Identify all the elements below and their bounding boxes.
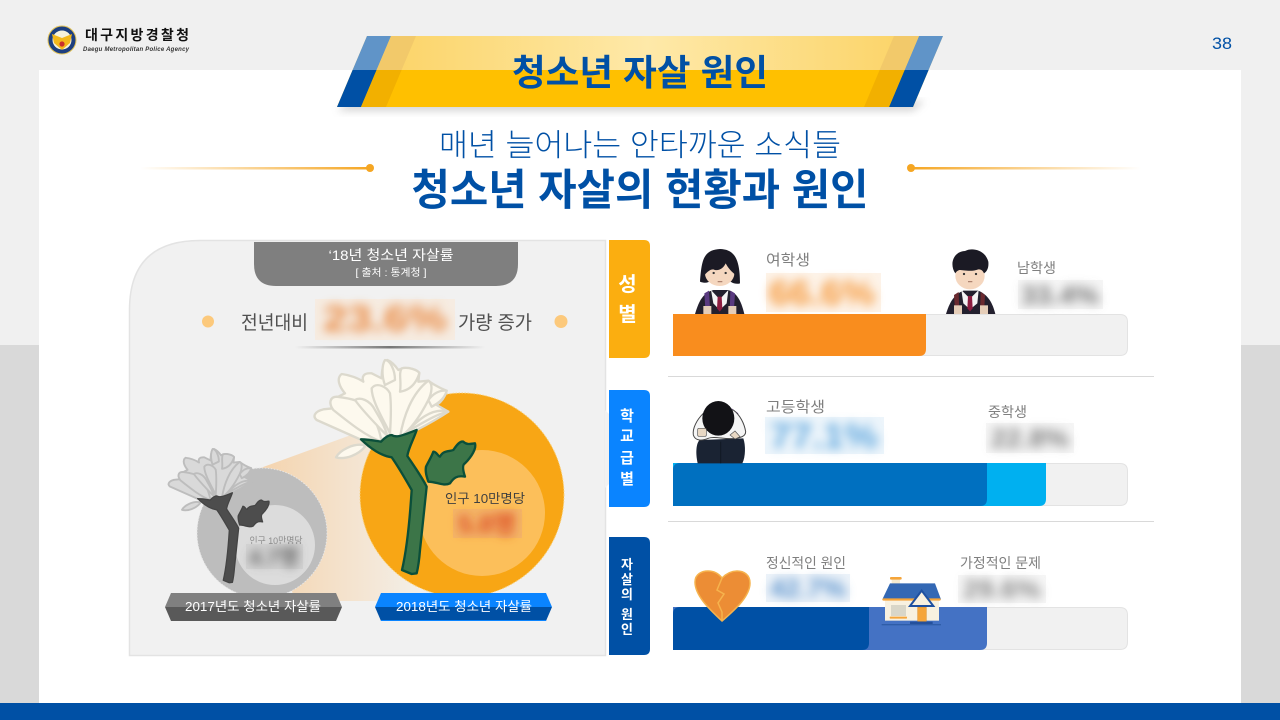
tab: causes: 인 [621, 622, 633, 637]
value: family causes: 29.6% [963, 574, 1041, 604]
circle: 2018 rate [360, 393, 564, 597]
label: mental causes: 정신적인 원인 [766, 555, 846, 571]
icon: boy student [946, 249, 995, 314]
value: male students: 33.4% [1021, 280, 1099, 310]
icon: broken heart [695, 571, 750, 621]
tab: causes: 자 [621, 557, 633, 572]
tab title: ‘18년 청소년 자살률 [328, 247, 454, 263]
ribbon: 2017 [165, 593, 342, 621]
value: mental causes: 42.7% [770, 573, 846, 603]
tab: gender [609, 240, 650, 358]
value: high school students: 77.1% [770, 417, 878, 456]
2017 caption: 인구 10만명당 [250, 536, 303, 547]
right decorative line [907, 164, 1141, 172]
ribbon: 2017: 2017년도 청소년 자살률 [185, 599, 321, 614]
value: female students: 66.6% [769, 274, 875, 313]
year-on-year increase statement: 가량 증가 [458, 312, 532, 334]
title banner [337, 36, 943, 111]
ribbon: 2018 [375, 593, 552, 621]
row: gender [609, 240, 1128, 358]
headline [140, 128, 1141, 215]
logo: police agency [48, 26, 190, 54]
label: middle school students: 중학생 [988, 404, 1027, 420]
2018 blurred value: 5.8명 [458, 511, 516, 539]
circle: 2017 rate [197, 468, 327, 598]
icon: grey chrysanthemum [169, 449, 269, 583]
row: school level [609, 390, 1128, 507]
bar: school level split [673, 463, 1128, 506]
banner title: 청소년 자살 원인 [512, 52, 768, 93]
tab: causes: 원 [621, 607, 633, 622]
tab: school level: 급 [620, 450, 634, 467]
tab: school level: 교 [620, 428, 634, 445]
headline line 2: 청소년 자살의 현황과 원인 [412, 167, 868, 215]
label: male students: 남학생 [1017, 260, 1056, 276]
bottom bar [0, 703, 1280, 720]
icon: white chrysanthemum [315, 360, 475, 574]
page number: 38 [1212, 34, 1232, 53]
tab source: [ 출처 : 통계청 ] [356, 267, 427, 279]
bar: causes split [673, 607, 1128, 650]
label: high school students: 고등학생 [766, 399, 825, 416]
panel heading tab [254, 242, 518, 286]
tab: gender: 별 [618, 303, 637, 326]
headline line 1: 매년 늘어나는 안타까운 소식들 [439, 128, 841, 163]
left decorative line [140, 164, 374, 172]
tab: causes [609, 537, 650, 655]
icon: girl student [695, 249, 744, 314]
tab: school level: 학 [620, 408, 634, 425]
panel: 2018 suicide rate [130, 240, 609, 656]
row: causes [609, 537, 1128, 655]
connecting beam between circles [255, 431, 420, 601]
tab: causes: 살 [621, 572, 633, 587]
tab: causes: 의 [621, 587, 633, 602]
year-on-year increase statement: 전년대비 [241, 312, 308, 334]
tab: gender: 성 [618, 273, 637, 296]
2018 caption: 인구 10만명당 [445, 491, 525, 506]
tab: school level [609, 390, 650, 507]
year-on-year increase statement: 23.6% [323, 298, 447, 339]
ribbon: 2018: 2018년도 청소년 자살률 [396, 599, 532, 614]
bar: gender split [673, 314, 1128, 356]
icon: police emblem [48, 26, 76, 54]
2017 blurred value: 4.7명 [249, 545, 299, 570]
tab: school level: 별 [620, 471, 634, 488]
icon: house [882, 577, 941, 625]
banner lower band [337, 70, 929, 107]
banner upper band [353, 36, 943, 70]
value: middle school students: 22.8% [991, 423, 1069, 453]
icon: crouching student [693, 401, 746, 463]
label: family causes: 가정적인 문제 [960, 555, 1041, 571]
agency english name: Daegu Metropolitan Police Agency [83, 47, 190, 53]
label: female students: 여학생 [766, 252, 810, 269]
year-on-year increase statement [202, 298, 568, 348]
agency name: 대구지방경찰청 [85, 27, 189, 43]
